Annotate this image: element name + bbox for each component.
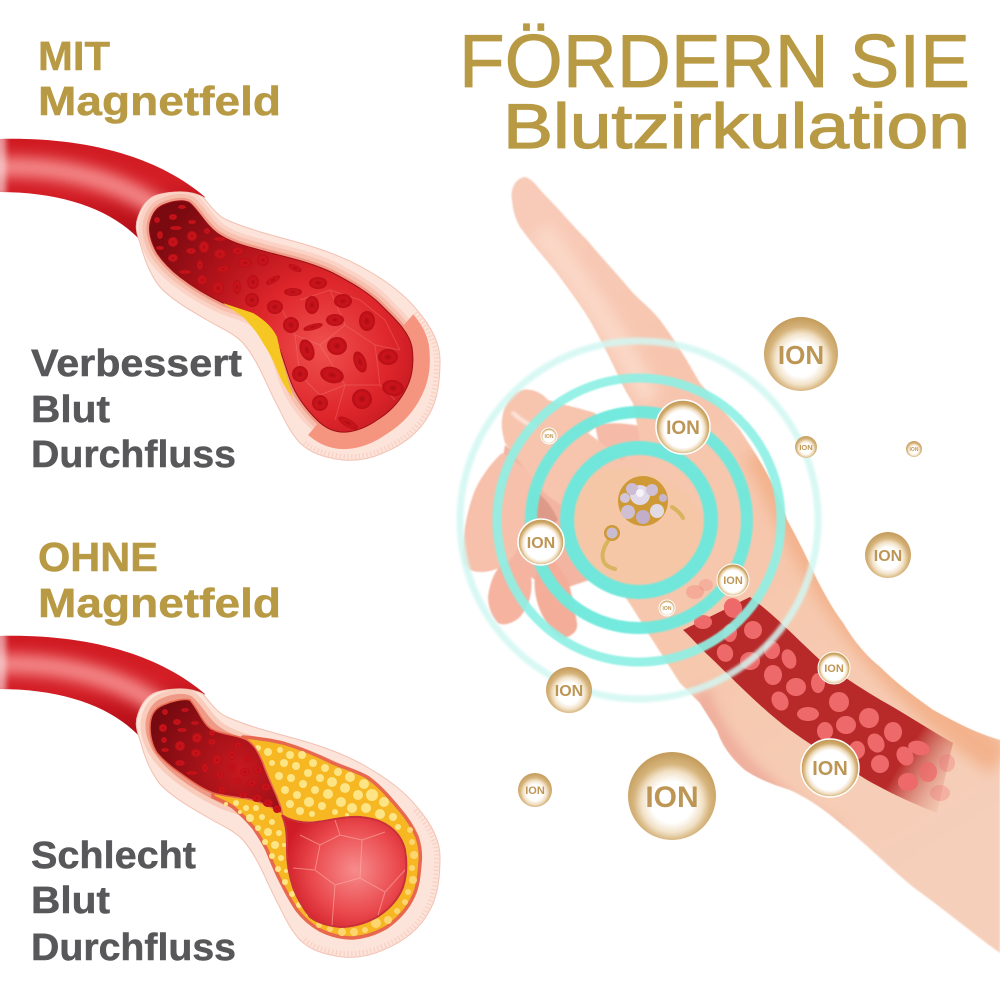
ring with gemstones: [603, 476, 683, 569]
heading: without magnetic field: Magnetfeld: [38, 580, 281, 626]
heading: with magnetic field: [38, 33, 281, 124]
finger highlight: [512, 412, 535, 428]
lower lumen: [282, 815, 406, 927]
plaque fat globules: [224, 745, 401, 916]
vessel wall: [136, 689, 440, 957]
ion bubble near wrist: ION: [723, 575, 743, 587]
text: improved blood flow: Durchfluss: [31, 434, 236, 476]
small ion bubble right: [795, 436, 817, 458]
small ion bubble right: ION: [799, 443, 813, 452]
text: improved blood flow: Blut: [31, 389, 110, 431]
ion bubble on finger: [656, 400, 710, 454]
text: poor blood flow: Durchfluss: [31, 927, 236, 969]
lower lumen cell pattern: [293, 820, 405, 925]
ion bubble on finger: ION: [666, 418, 700, 439]
blood stream in wrist: [683, 579, 955, 813]
tiny ion bubble under ring: [659, 600, 675, 616]
arm and pointing finger: [512, 177, 1000, 953]
title: Blutzirkulation: [503, 92, 970, 162]
ion bubble lower left: [546, 667, 592, 713]
ion bubble near wrist: [717, 564, 749, 596]
heading: without magnetic field: [38, 534, 281, 626]
ion bubble on wrist upper: [818, 652, 850, 684]
ion bubble right: [865, 532, 911, 578]
vessel lumen: [149, 201, 413, 432]
vessel tube: [0, 135, 205, 240]
heading: with magnetic field: MIT: [38, 33, 110, 79]
red blood cells: [154, 205, 405, 432]
large ion bubble bottom: ION: [645, 781, 699, 814]
ion bubble on wrist lower: ION: [812, 758, 848, 780]
tiny ion bubble on finger: [541, 428, 557, 444]
title: [459, 19, 970, 162]
vessel tube: [0, 632, 205, 737]
vessel wall: [136, 192, 440, 460]
magnetic field rings: [460, 341, 818, 699]
text: poor blood flow: [31, 835, 236, 969]
ring finger: [571, 467, 706, 586]
ion bubble left: ION: [527, 535, 555, 552]
large ion bubble bottom: [628, 752, 716, 840]
ion bubble left: [518, 519, 564, 565]
ion bubble on wrist lower: [801, 739, 859, 797]
heading: without magnetic field: OHNE: [38, 534, 158, 580]
tiny ion bubble under ring: ION: [663, 606, 672, 612]
ion bubble right: ION: [874, 548, 902, 565]
heading: with magnetic field: Magnetfeld: [38, 78, 281, 124]
title: FÖRDERN SIE: [459, 19, 970, 103]
folded fingers behind: [463, 423, 700, 638]
small gem: [604, 525, 620, 541]
lumen cell pattern: [280, 290, 400, 420]
tiny ion bubble far right: ION: [910, 447, 919, 453]
healthy blood vessel illustration: [0, 135, 440, 460]
ion bubble lower left: ION: [555, 683, 583, 700]
tiny ion bubble far right: [906, 441, 922, 457]
ring band: [603, 507, 683, 569]
small ion bubble bottom left: ION: [525, 785, 545, 797]
text: poor blood flow: Schlecht: [31, 835, 196, 877]
upper narrowed lumen: [150, 699, 282, 813]
text: improved blood flow: Verbessert: [31, 343, 242, 385]
blood cells in narrowed section: [159, 708, 281, 813]
text: improved blood flow: [31, 343, 242, 476]
tiny ion bubble on finger: ION: [545, 434, 554, 440]
ion bubble large top: [764, 317, 838, 391]
blood cells in stream: [686, 579, 955, 801]
curled top finger: [502, 390, 628, 513]
small plaque deposit: [223, 303, 293, 397]
arm shading: [540, 230, 1000, 835]
ion bubble large top: ION: [778, 340, 824, 370]
small ion bubble bottom left: [518, 773, 552, 807]
ion bubbles: [518, 317, 922, 840]
ion bubble on wrist upper: ION: [824, 663, 844, 675]
hand and arm: [463, 177, 1000, 953]
clogged blood vessel illustration: [0, 632, 440, 957]
fatty plaque: [213, 737, 420, 938]
text: poor blood flow: Blut: [31, 880, 110, 922]
main gem cluster: [618, 476, 668, 526]
